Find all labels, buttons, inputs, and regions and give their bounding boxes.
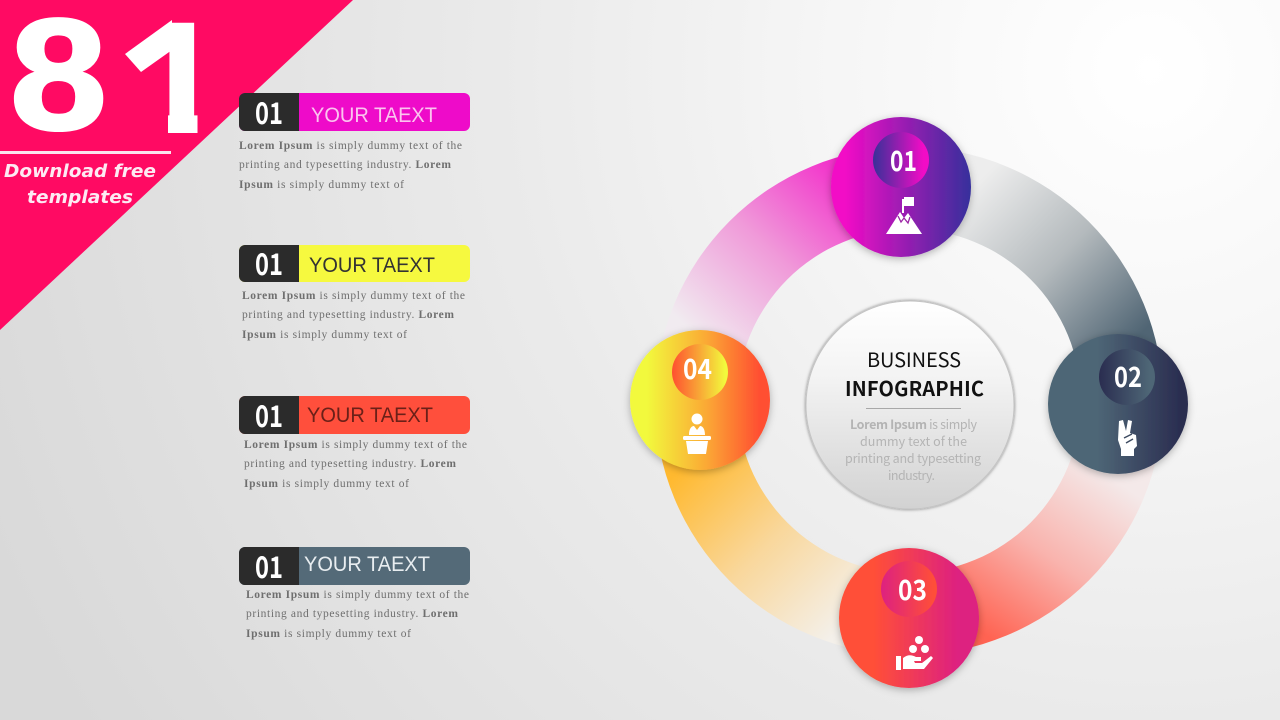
banner caption: Download free <box>4 161 156 182</box>
ring chart <box>655 147 1163 655</box>
text block 2: printing and typesetting industry. Lorem <box>242 309 454 321</box>
ring segment: orange <box>655 401 909 655</box>
panel: item 1 <box>239 89 470 191</box>
banner caption: templates <box>27 187 133 208</box>
label tab 1: 01 <box>255 89 283 133</box>
corner banner <box>0 0 353 330</box>
label tab 3 <box>239 392 470 436</box>
step 2 node: 02 <box>1114 356 1142 396</box>
icon: podium speaker <box>683 414 711 454</box>
text block 4: Ipsum is simply dummy text of <box>246 628 411 640</box>
label tab 3: 01 <box>255 392 283 436</box>
step 2 node <box>1048 334 1188 474</box>
text block 1: printing and typesetting industry. Lorem <box>239 159 451 171</box>
label tab 1 <box>239 89 470 133</box>
label tab 4 <box>239 543 470 587</box>
center circle <box>806 301 1014 509</box>
label tab 2: YOUR TAEXT <box>309 254 435 277</box>
step 1 node: 01 <box>890 140 917 180</box>
panel: item 3 <box>239 392 470 490</box>
ring segment: pink <box>655 147 909 401</box>
label tab 2: 01 <box>255 240 283 284</box>
text block 1: Lorem Ipsum is simply dummy text of the <box>239 140 462 152</box>
center text: industry. <box>888 465 935 484</box>
text block 1: Ipsum is simply dummy text of <box>239 179 404 191</box>
icon: mountain flag <box>886 197 922 234</box>
text block 3: Ipsum is simply dummy text of <box>244 478 409 490</box>
step 3 node: 03 <box>898 569 927 609</box>
step 3 node <box>839 548 979 688</box>
step 4 node: 04 <box>683 348 712 388</box>
label tab 1: YOUR TAEXT <box>311 104 437 127</box>
center heading: BUSINESS <box>867 344 961 373</box>
text block 2: Ipsum is simply dummy text of <box>242 329 407 341</box>
step 4 node <box>630 330 770 470</box>
big number 81 <box>14 17 198 133</box>
ring segment: red <box>909 401 1163 655</box>
panel: item 2 <box>239 240 470 341</box>
icon: peace hand <box>1118 420 1137 456</box>
text block 4: Lorem Ipsum is simply dummy text of the <box>246 589 469 601</box>
step 1 node <box>831 117 971 257</box>
center text: printing and typesetting <box>845 448 981 467</box>
label tab 4: YOUR TAEXT <box>304 553 430 576</box>
icon: hand with coins <box>896 636 933 670</box>
text block 4: printing and typesetting industry. Lorem <box>246 608 458 620</box>
label tab 2 <box>239 240 470 284</box>
panel: item 4 <box>239 543 470 640</box>
ring segment: grey <box>909 147 1163 401</box>
center text: Lorem Ipsum is simply <box>850 414 977 433</box>
center text: dummy text of the <box>860 431 967 450</box>
text block 2: Lorem Ipsum is simply dummy text of the <box>242 290 465 302</box>
text block 3: Lorem Ipsum is simply dummy text of the <box>244 439 467 451</box>
banner divider <box>0 151 171 154</box>
label tab 4: 01 <box>255 543 283 587</box>
label tab 3: YOUR TAEXT <box>307 404 433 427</box>
text block 3: printing and typesetting industry. Lorem <box>244 458 456 470</box>
center heading: INFOGRAPHIC <box>845 373 984 402</box>
